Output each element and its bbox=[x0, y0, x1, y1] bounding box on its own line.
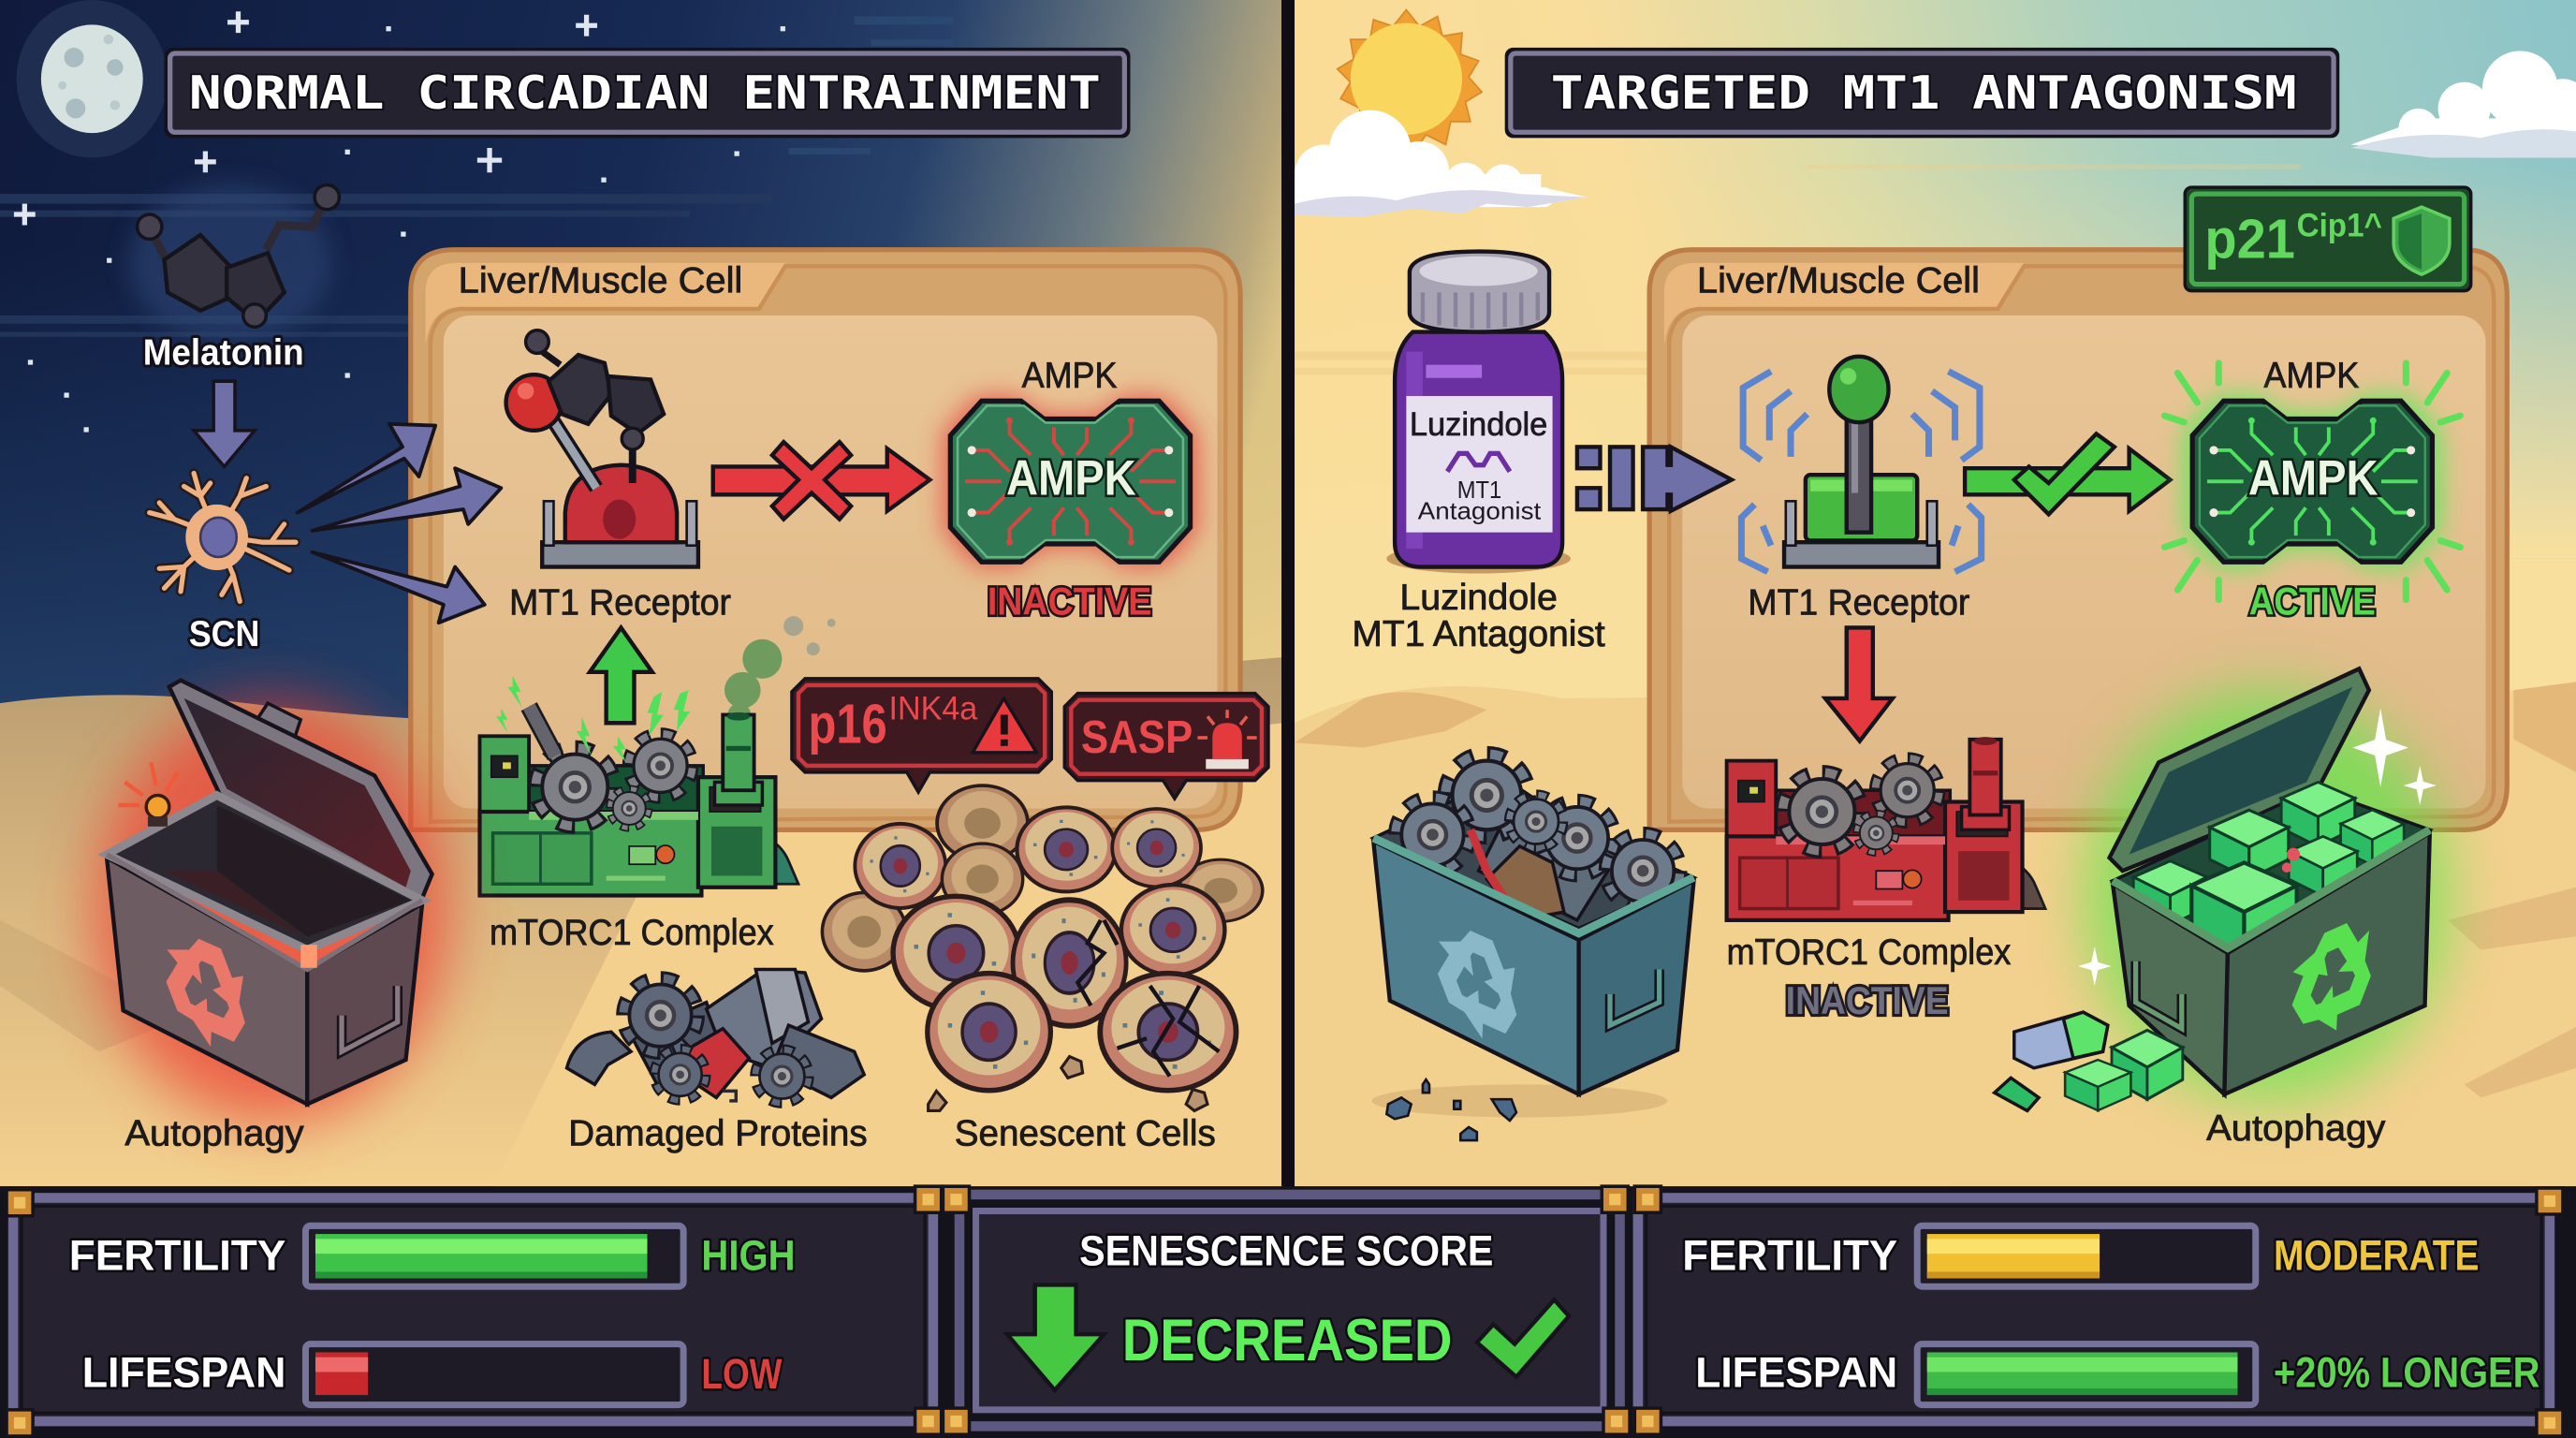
icon: moon bbox=[17, 0, 168, 157]
icon: autophagy bin active with cubes bbox=[1995, 668, 2448, 1110]
label: senescent cells: Senescent Cells bbox=[955, 1113, 1216, 1153]
icon: AMPK chip inactive: AMPK bbox=[1006, 450, 1136, 506]
label: damaged proteins: Damaged Proteins bbox=[568, 1113, 868, 1153]
label: luzindole MT1 antagonist bbox=[1352, 578, 1605, 654]
icon: luzindole bottle bbox=[1386, 252, 1571, 574]
bar: fertility high bbox=[305, 1225, 683, 1286]
panel: bottom status HUD bbox=[0, 1186, 2576, 1438]
label: liver/muscle cell: Liver/Muscle Cell bbox=[459, 260, 742, 301]
icon: melatonin molecule bbox=[128, 184, 339, 342]
label: autophagy left: Autophagy bbox=[124, 1113, 304, 1153]
icon: damaged proteins pile bbox=[567, 970, 864, 1101]
panel: liver/muscle cell (left) bbox=[411, 250, 1240, 829]
smoke from machine bbox=[724, 639, 782, 726]
bar: lifespan longer bbox=[1917, 1344, 2256, 1405]
panel: normal circadian entrainment scene bbox=[0, 0, 1283, 1186]
tag: SASP bbox=[1064, 694, 1268, 799]
label: AMPK: AMPK bbox=[1022, 356, 1118, 396]
title banner: normal circadian entrainment: NORMAL CIRCADIAN ENTRAINMENT bbox=[189, 66, 1101, 120]
label: mTORC1 complex: mTORC1 Complex bbox=[1727, 932, 2011, 973]
icon: MT1 receptor lever engaged bbox=[506, 330, 698, 567]
desert sand bbox=[1295, 682, 2576, 1186]
arrow: blocked signal to AMPK bbox=[713, 442, 929, 520]
icon: sun bbox=[1338, 10, 1482, 154]
value: low: LOW bbox=[701, 1350, 783, 1398]
icon: red machine inactive bbox=[1727, 737, 2045, 920]
tag: p16 INK4a: INK4a bbox=[889, 691, 978, 727]
corner ornaments bbox=[7, 1186, 2563, 1436]
title banner: normal circadian entrainment bbox=[165, 48, 1131, 138]
bar: lifespan low bbox=[305, 1344, 683, 1405]
title banner: targeted MT1 antagonism bbox=[1505, 48, 2339, 138]
icon: luzindole bottle: Antagonist bbox=[1418, 499, 1541, 525]
status: mTORC1 inactive: INACTIVE bbox=[1786, 978, 1949, 1022]
status: inactive: INACTIVE bbox=[988, 579, 1151, 623]
tag: SASP: SASP bbox=[1081, 712, 1193, 763]
icon: check mark bbox=[1477, 1299, 1569, 1377]
icon: mTORC1 machine active bbox=[479, 675, 798, 896]
stars bbox=[14, 11, 785, 433]
icon: luzindole bottle: MT1 bbox=[1457, 477, 1501, 504]
label: luzindole MT1 antagonist: MT1 Antagonist bbox=[1352, 614, 1605, 654]
icon: cloud right bbox=[2351, 51, 2576, 157]
tag: p21 Cip1: Cip1^ bbox=[2297, 208, 2382, 244]
label: lifespan left: LIFESPAN bbox=[82, 1348, 285, 1396]
icon: autophagy bin empty, alarm bbox=[94, 681, 448, 1123]
heading: senescence score: SENESCENCE SCORE bbox=[1079, 1226, 1493, 1274]
label: fertility right: FERTILITY bbox=[1682, 1232, 1897, 1280]
status: active: ACTIVE bbox=[2249, 579, 2376, 623]
label: luzindole MT1 antagonist: Luzindole bbox=[1399, 578, 1558, 618]
label: MT1 receptor: MT1 Receptor bbox=[509, 582, 731, 623]
label: AMPK: AMPK bbox=[2264, 356, 2360, 396]
bar: fertility moderate bbox=[1917, 1225, 2256, 1286]
value: moderate: MODERATE bbox=[2274, 1232, 2479, 1280]
tag: p16 INK4a: p16 bbox=[809, 692, 887, 755]
smoke wisps bbox=[783, 616, 835, 655]
tag: p21 Cip1: p21 bbox=[2204, 208, 2295, 271]
day sky background bbox=[1295, 0, 2576, 1186]
panel: targeted MT1 antagonism scene bbox=[1295, 0, 2576, 1186]
arrows: SCN outputs bbox=[298, 424, 501, 623]
night sky background bbox=[0, 0, 1283, 1186]
label: fertility left: FERTILITY bbox=[69, 1232, 285, 1280]
title banner: targeted MT1 antagonism: TARGETED MT1 ANTAGONISM bbox=[1551, 66, 2297, 120]
label: mTORC1 complex: mTORC1 Complex bbox=[490, 913, 774, 953]
panel: liver/muscle cell (right) bbox=[1649, 250, 2507, 829]
arrow: mTORC1 activates up bbox=[590, 627, 652, 723]
icon: recycling bin full of debris bbox=[1372, 757, 1694, 1140]
label: melatonin: Melatonin bbox=[143, 333, 304, 374]
desert sand bbox=[0, 657, 1283, 1186]
label: MT1 receptor: MT1 Receptor bbox=[1748, 582, 1970, 623]
arrow: antagonist dashed arrow bbox=[1577, 447, 1732, 511]
panel: right status bbox=[1638, 1197, 2550, 1421]
arrow: score down bbox=[1007, 1284, 1104, 1390]
icon: luzindole bottle: Luzindole bbox=[1410, 406, 1547, 443]
label: autophagy right: Autophagy bbox=[2206, 1108, 2386, 1149]
icon: SCN neuron bbox=[150, 473, 296, 601]
arrow: signal passes to AMPK bbox=[1965, 433, 2170, 514]
label: lifespan right: LIFESPAN bbox=[1695, 1348, 1897, 1396]
label: liver/muscle cell: Liver/Muscle Cell bbox=[1697, 260, 1980, 301]
tag: p21 Cip1 bbox=[2185, 187, 2471, 291]
arrow: mTORC1 inhibited down bbox=[1825, 627, 1893, 741]
icon: AMPK chip active bbox=[2164, 363, 2460, 600]
panel: left status bbox=[13, 1197, 933, 1421]
tag: p16 INK4a bbox=[792, 679, 1051, 792]
icon: cloud left bbox=[1295, 110, 1587, 217]
value: high: HIGH bbox=[701, 1232, 795, 1280]
icon: AMPK chip inactive bbox=[944, 396, 1197, 566]
divider between scenes bbox=[1281, 0, 1295, 1186]
icon: MT1 receptor lever upright with vibration bbox=[1741, 357, 1982, 572]
value: plus twenty percent longer: +20% LONGER bbox=[2274, 1348, 2539, 1396]
value: decreased: DECREASED bbox=[1122, 1308, 1453, 1373]
icon: AMPK chip active: AMPK bbox=[2248, 450, 2378, 506]
label: SCN: SCN bbox=[189, 614, 259, 654]
icon: senescent cells cluster bbox=[822, 785, 1263, 1110]
arrow: melatonin to SCN bbox=[194, 381, 255, 466]
panel: senescence score bbox=[959, 1195, 1620, 1426]
